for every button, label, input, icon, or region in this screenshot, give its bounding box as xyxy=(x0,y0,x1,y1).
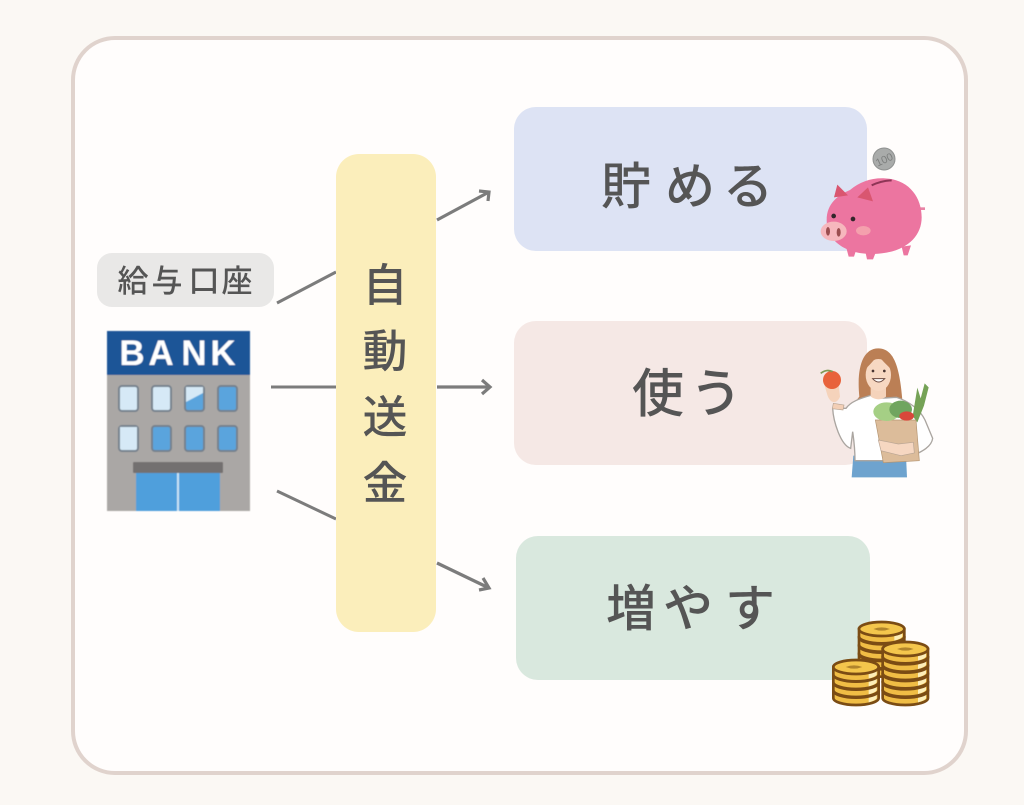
vertical label: auto transfer: 動 xyxy=(362,326,408,377)
panel: main card xyxy=(73,38,966,773)
connector: bank lower to auto transfer xyxy=(277,491,336,519)
icon: piggy bank with coin: 100 xyxy=(874,151,895,169)
icon: piggy bank with coin xyxy=(821,148,925,259)
connector: salary account to auto transfer xyxy=(277,272,336,303)
label: salary account xyxy=(97,253,274,307)
right stack xyxy=(883,642,928,705)
back stack xyxy=(859,622,904,677)
icon: bank building: BANK xyxy=(119,334,236,373)
panel: auto transfer bar xyxy=(336,154,436,632)
arrow: to save xyxy=(437,191,489,220)
heading: grow: 増やす xyxy=(606,581,775,637)
left stack xyxy=(833,660,879,705)
heading: save: 貯める xyxy=(601,159,773,215)
arrow: to spend xyxy=(437,380,490,394)
panel: spend xyxy=(514,321,867,465)
panel: grow xyxy=(516,536,870,680)
arrow: to grow xyxy=(437,563,489,590)
heading: spend: 使う xyxy=(632,366,742,424)
vertical label: auto transfer: 金 xyxy=(362,458,408,509)
icon: coin stacks xyxy=(833,622,928,705)
connector: bank to auto transfer xyxy=(271,386,336,388)
icon: bank building xyxy=(107,331,250,511)
vertical label: auto transfer: 自 xyxy=(362,260,408,311)
panel: save xyxy=(514,107,867,251)
icon: woman with groceries xyxy=(821,348,933,477)
vertical label: auto transfer: 送 xyxy=(362,392,408,443)
label: salary account: 給与口座 xyxy=(118,264,252,299)
